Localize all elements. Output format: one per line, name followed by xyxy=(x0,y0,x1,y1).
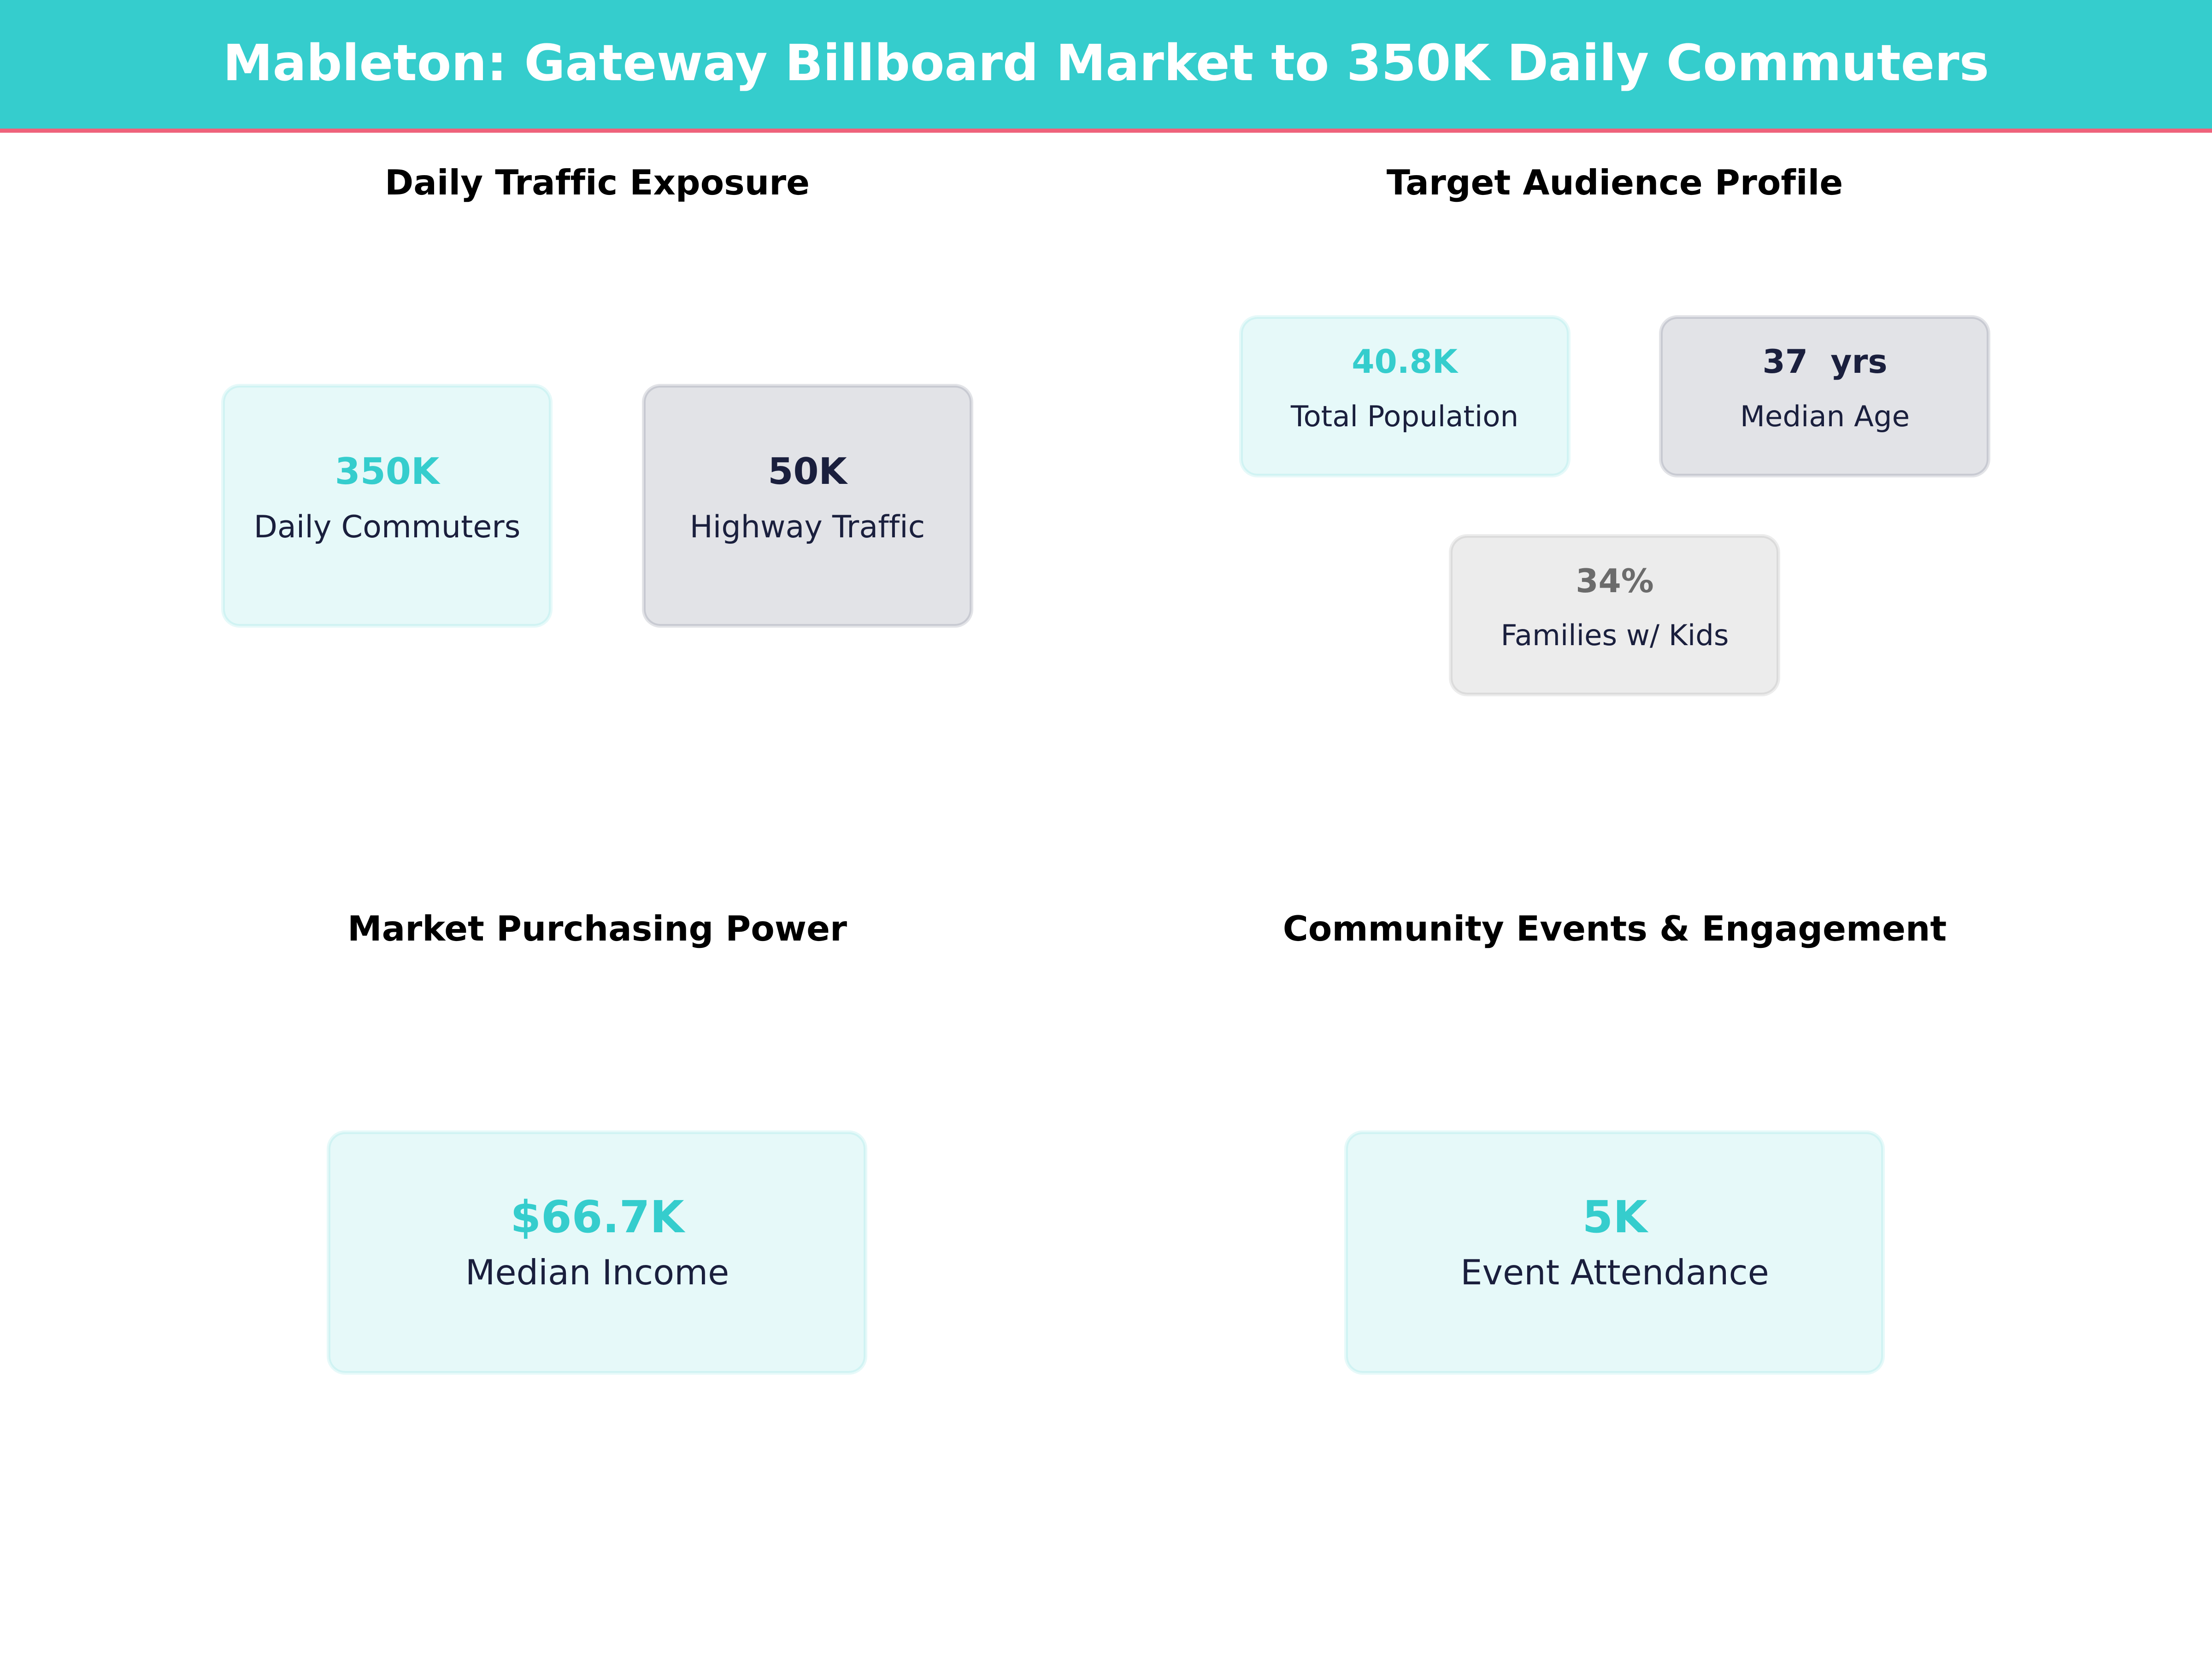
card: median income: Median Income xyxy=(465,1252,729,1293)
heading: target audience profile: Target Audience Profile xyxy=(1387,162,1843,203)
card: median age: Median Age xyxy=(1740,400,1910,433)
card: families with kids: Families w/ Kids xyxy=(1500,618,1729,652)
heading: daily traffic exposure: Daily Traffic Exposure xyxy=(385,162,810,203)
card: total population: Total Population xyxy=(1290,400,1518,433)
card: event attendance: 5K xyxy=(1583,1191,1649,1243)
card: median income: $66.7K xyxy=(510,1191,686,1243)
card: daily commuters: Daily Commuters xyxy=(254,509,520,545)
card: event attendance: Event Attendance xyxy=(1460,1252,1769,1293)
panel: daily traffic exposure xyxy=(223,162,971,626)
card: highway traffic: 50K xyxy=(768,450,848,493)
card: median income xyxy=(329,1132,865,1373)
card: daily commuters: 350K xyxy=(335,450,441,493)
card: total population: 40.8K xyxy=(1352,342,1459,381)
title: Mableton: Gateway Billboard Market to 350K Daily Commuters xyxy=(223,34,1989,92)
header banner xyxy=(0,0,2212,133)
panel: target audience profile xyxy=(1241,162,1988,694)
panel: market purchasing power xyxy=(329,908,865,1373)
card: event attendance xyxy=(1346,1132,1883,1373)
card: median age xyxy=(1661,317,1988,476)
card: median age: 37 yrs xyxy=(1762,342,1888,381)
card: total population xyxy=(1241,317,1569,476)
heading: market purchasing power: Market Purchasing Power xyxy=(347,908,847,949)
card: daily commuters xyxy=(223,386,551,626)
card: highway traffic: Highway Traffic xyxy=(690,509,925,545)
panel: community events and engagement xyxy=(1283,908,1947,1373)
card: highway traffic xyxy=(644,386,971,626)
heading: community events and engagement: Community Events & Engagement xyxy=(1283,908,1947,949)
card: families with kids xyxy=(1451,536,1778,694)
card: families with kids: 34% xyxy=(1576,562,1654,600)
